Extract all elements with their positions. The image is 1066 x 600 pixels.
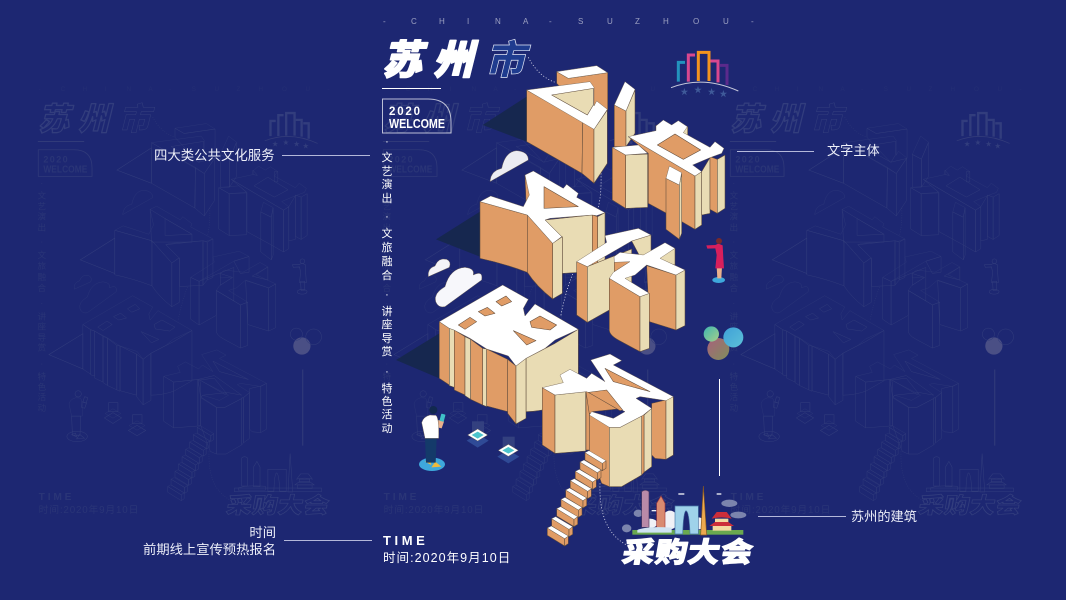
title: 苏州市: 市 xyxy=(483,38,534,83)
time block xyxy=(383,533,511,565)
clouds: middle xyxy=(428,259,482,307)
vertical white line xyxy=(718,379,720,476)
vertical list of four service categories: · xyxy=(385,136,389,148)
3D character: 化 xyxy=(577,228,685,352)
vertical list of four service categories: 赏 xyxy=(382,345,392,358)
badge: 2020 welcome: WELCOME xyxy=(389,117,445,131)
vertical list of four service categories: 特 xyxy=(382,381,392,395)
annotation: 时间 xyxy=(143,525,372,557)
vertical list of four service categories: · xyxy=(385,211,389,223)
figure: woman xyxy=(706,238,725,283)
cloud: upper xyxy=(490,151,528,182)
vertical list of four service categories: 文 xyxy=(382,226,392,240)
logo: skyline with stars: ★ xyxy=(694,85,702,94)
pagoda xyxy=(657,496,665,528)
vertical list of four service categories: 座 xyxy=(382,317,392,331)
vertical list of four service categories: 出 xyxy=(382,191,392,205)
vertical list of four service categories: 导 xyxy=(382,332,392,345)
vertical list of four service categories: 合 xyxy=(382,268,392,282)
vertical list of four service categories: · xyxy=(385,366,389,378)
train xyxy=(637,527,672,533)
vertical list of four service categories: 色 xyxy=(382,394,392,408)
title: 苏州市 xyxy=(380,38,534,83)
logo: skyline with stars: ★ xyxy=(680,87,688,96)
logo: skyline with stars: ★ xyxy=(719,90,727,99)
title: 苏州市: 州 xyxy=(431,38,482,83)
annotation: 时间: 时间 xyxy=(249,525,276,540)
time block: TIME xyxy=(383,533,428,548)
annotation: 苏州的建筑: 苏州的建筑 xyxy=(851,509,917,524)
isometric artwork xyxy=(396,52,743,546)
pavilion xyxy=(709,512,734,531)
stairs xyxy=(547,451,606,546)
badge: 2020 welcome: 2020 xyxy=(389,106,420,118)
vertical list of four service categories: · xyxy=(385,289,389,301)
time block: 时间:2020年9月10日 xyxy=(383,551,511,565)
ground xyxy=(632,530,743,535)
vertical list of four service categories: 旅 xyxy=(382,240,392,254)
main poster xyxy=(380,17,756,568)
colour circles xyxy=(704,326,743,360)
3D character: 文 xyxy=(436,171,605,299)
3D character: 务 xyxy=(542,354,673,487)
logo: skyline with stars: ★ xyxy=(708,87,716,96)
3D character: 服 xyxy=(396,285,578,424)
vertical list of four service categories: 艺 xyxy=(382,165,392,178)
gate building xyxy=(675,506,698,534)
3D character: 共 xyxy=(612,120,725,239)
annotation: 文字主体: 文字主体 xyxy=(827,143,880,158)
3D character: 公 xyxy=(483,66,635,183)
logo: skyline with stars xyxy=(671,52,738,99)
header line: CHINA SUZHOU: -CHINA-SUZHOU- xyxy=(383,17,754,26)
event title: 采购大会: 采购大会 xyxy=(620,537,756,568)
vertical list of four service categories: 文 xyxy=(382,150,392,164)
vertical list of four service categories xyxy=(382,136,392,435)
platform icons xyxy=(467,421,519,463)
Suzhou landmark skyline xyxy=(622,486,746,535)
title underline xyxy=(382,88,441,90)
vertical list of four service categories: 动 xyxy=(382,422,392,435)
ghost poster centre xyxy=(381,86,677,519)
vertical list of four service categories: 讲 xyxy=(382,304,392,318)
annotation: 时间: 前期线上宣传预热报名 xyxy=(143,541,276,557)
vertical list of four service categories: 活 xyxy=(382,408,392,421)
vertical list of four service categories: 融 xyxy=(382,255,392,268)
figure: man with phone xyxy=(419,406,446,471)
vertical list of four service categories: 演 xyxy=(382,177,392,191)
spire xyxy=(701,486,707,535)
ghost poster right xyxy=(728,86,1024,519)
annotation: 四大类公共文化服务: 四大类公共文化服务 xyxy=(154,148,275,163)
badge: 2020 welcome xyxy=(382,99,451,133)
ghost poster left xyxy=(36,86,332,519)
title: 苏州市: 苏 xyxy=(380,38,431,83)
clouds behind xyxy=(622,500,746,532)
purple tower xyxy=(642,490,649,527)
dotted connectors xyxy=(528,57,627,545)
